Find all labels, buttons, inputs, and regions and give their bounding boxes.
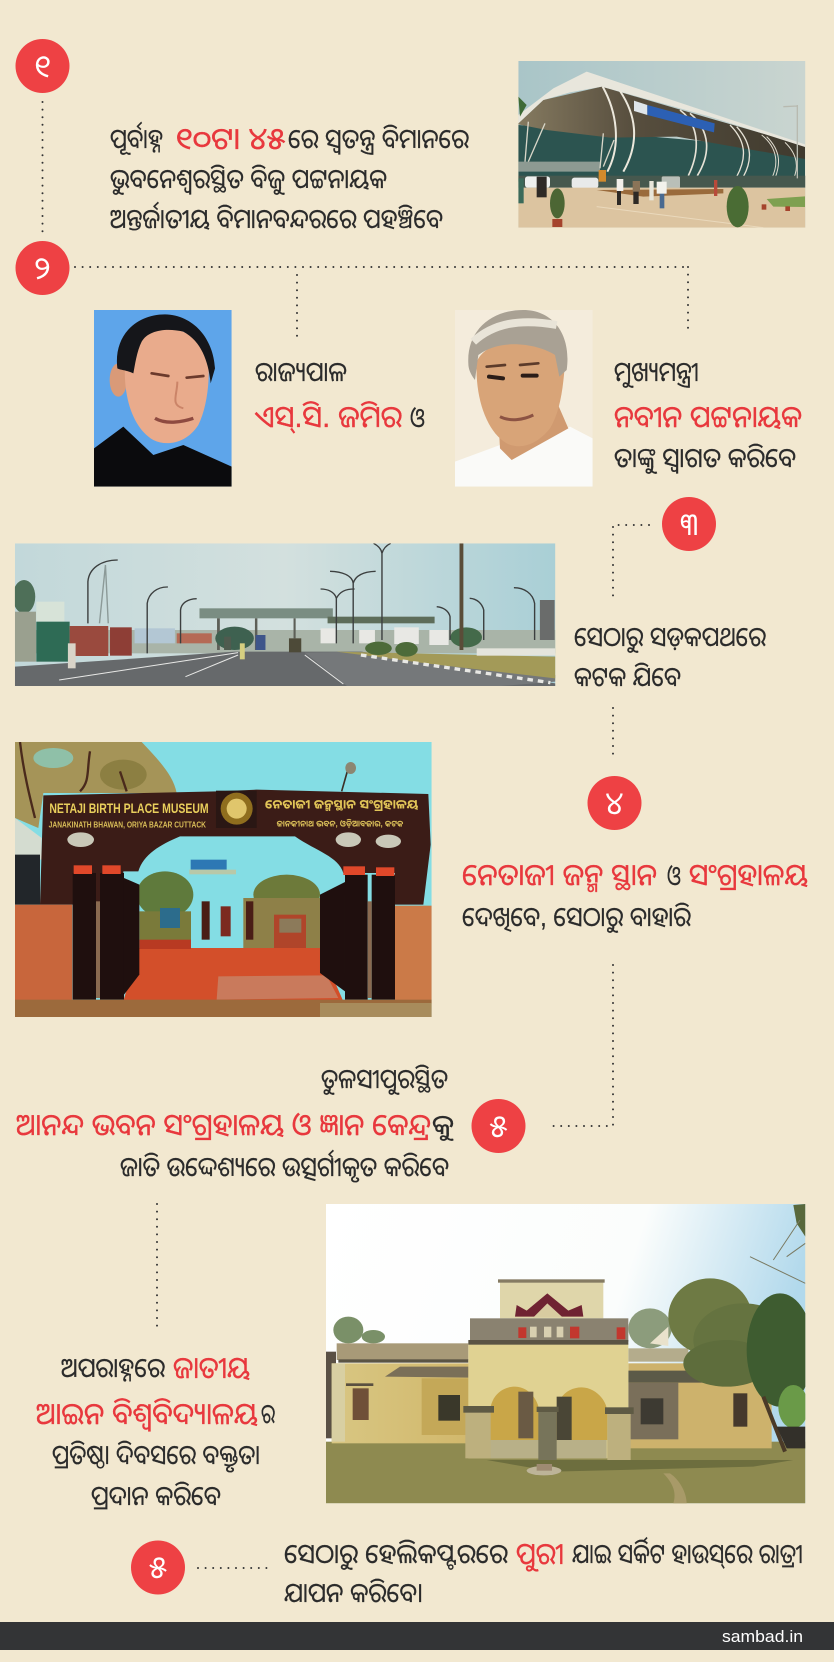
text: step 5 law university — [36, 1352, 275, 1511]
photo: highway toll plaza — [13, 543, 555, 686]
text: step 3 by road to Cuttack: କଟକ ଯିବେ — [574, 662, 681, 692]
step 5 number badge — [472, 1099, 526, 1153]
text: step 5 Ananda Bhavan: ଜାତି ଉଦ୍ଦେଶ୍ୟରେ ଉତ୍ସର୍ଗୀକୃତ କରିବେ — [120, 1149, 449, 1182]
connector: step 4 to step 5 — [550, 965, 613, 1126]
text: chief minister: ମୁଖ୍ୟମନ୍ତ୍ରୀ — [614, 357, 699, 388]
text: step 1 arrival — [110, 121, 469, 234]
step 3 number badge: ୩ — [680, 507, 698, 542]
step 6 number badge — [131, 1540, 185, 1594]
photo: airport terminal — [518, 61, 805, 228]
text: step 5 law university: ପ୍ରଦାନ କରିବେ — [91, 1481, 221, 1511]
photo: Netaji birth place museum gate: ଜାନକୀନାଥ ଭବନ, ଓଡ଼ିଆବଜାର, କଟକ — [277, 818, 403, 828]
text: step 4 museum — [462, 859, 808, 933]
text: step 4 museum: ସଂଗ୍ରହାଳୟ — [689, 859, 808, 892]
text: step 6 Puri by helicopter — [284, 1537, 803, 1608]
photo: Ananda Bhavan house — [326, 1204, 813, 1503]
text: step 3 by road to Cuttack — [574, 622, 766, 692]
text: step 4 museum: ଦେଖିବେ, ସେଠାରୁ ବାହାରି — [462, 902, 691, 933]
text: step 5 law university: ଜାତୀୟ — [173, 1352, 250, 1385]
step 1 number badge: ୧ — [34, 49, 51, 84]
connector: road text to step 4 — [612, 708, 614, 756]
text: step 6 Puri by helicopter: ପୁରୀ — [516, 1538, 564, 1572]
connector: step 6 to text — [198, 1567, 268, 1569]
text: governor: ରାଜ୍ୟପାଳ — [255, 357, 347, 387]
step 4 number badge: ୪ — [606, 786, 624, 821]
photo: governor portrait — [94, 310, 232, 487]
text: step 5 law university: ଅପରାହ୍ନରେ — [61, 1353, 165, 1383]
footer bar — [0, 1622, 834, 1650]
photo: Netaji birth place museum gate: JANAKINATH BHAWAN, ORIYA BAZAR CUTTACK — [49, 819, 206, 829]
step 4 number badge — [588, 776, 642, 830]
text: step 5 law university: ଆଇନ ବିଶ୍ୱବିଦ୍ୟାଳୟ — [36, 1398, 258, 1432]
step 2 number badge: ୨ — [34, 251, 51, 286]
text: step 5 Ananda Bhavan: କୁ — [432, 1110, 455, 1141]
step 1 number badge — [16, 39, 70, 93]
text: step 3 by road to Cuttack: ସେଠାରୁ ସଡ଼କପଥରେ — [574, 622, 766, 653]
connector: step 3 to road text — [613, 525, 649, 601]
step 5 number badge: ୫ — [490, 1109, 508, 1144]
text: chief minister: ନବୀନ ପଟ୍ଟନାୟକ — [614, 401, 802, 434]
text: step 5 Ananda Bhavan: ଆନନ୍ଦ ଭବନ ସଂଗ୍ରହାଳୟ ଓ ଜ୍ଞାନ କେନ୍ଦ୍ର — [16, 1109, 431, 1142]
text: step 1 arrival: ଭୁବନେଶ୍ୱରସ୍ଥିତ ବିଜୁ ପଟ୍ଟନାୟକ — [110, 164, 387, 195]
text: governor: ଓ — [410, 403, 425, 433]
text: step 1 arrival: ଅନ୍ତର୍ଜାତୀୟ ବିମାନବନ୍ଦରରେ ପହଞ୍ଚିବେ — [110, 201, 443, 234]
text: step 6 Puri by helicopter: ଯାପନ କରିବେ। — [284, 1578, 423, 1608]
text: step 5 law university: ପ୍ରତିଷ୍ଠା ଦିବସରେ ବକ୍ତୃତା — [52, 1440, 260, 1473]
footer bar: sambad.in — [722, 1627, 803, 1646]
photo: Netaji birth place museum gate: ନେତାଜୀ ଜନ୍ମସ୍ଥାନ ସଂଗ୍ରହାଳୟ — [265, 798, 419, 812]
text: step 4 museum: ଓ — [667, 861, 681, 891]
text: governor — [254, 357, 425, 434]
text: chief minister — [614, 357, 802, 474]
text: step 1 arrival: ରେ ସ୍ୱତନ୍ତ୍ର ବିମାନରେ — [288, 124, 469, 155]
text: chief minister: ତାଙ୍କୁ ସ୍ୱାଗତ କରିବେ — [614, 443, 796, 474]
text: step 5 Ananda Bhavan: ତୁଳସୀପୁରସ୍ଥିତ — [321, 1064, 448, 1095]
connector: step 5 down to university text — [156, 1204, 158, 1330]
step 3 number badge — [662, 497, 716, 551]
step 6 number badge: ୫ — [149, 1550, 167, 1585]
text: step 5 law university: ର — [261, 1399, 275, 1429]
text: step 5 Ananda Bhavan — [16, 1064, 455, 1182]
photo: chief minister portrait — [455, 310, 593, 487]
text: step 4 museum: ନେତାଜୀ ଜନ୍ମ ସ୍ଥାନ — [462, 859, 657, 893]
text: governor: ଏସ୍.ସି. ଜମିର — [254, 401, 402, 434]
connector: step 2 branches — [75, 267, 689, 343]
text: step 1 arrival: ପୂର୍ବାହ୍ନ — [110, 121, 163, 155]
text: step 1 arrival: ୧୦ଟା ୪୫ — [175, 123, 285, 156]
photo: Netaji birth place museum gate: NETAJI BIRTH PLACE MUSEUM — [49, 800, 209, 816]
step 2 number badge — [16, 241, 70, 295]
text: step 6 Puri by helicopter: ସେଠାରୁ ହେଲିକପ୍ଟରରେ — [284, 1539, 508, 1570]
connector: step 1 to step 2 — [42, 102, 44, 236]
photo: Netaji birth place museum gate — [15, 742, 432, 1017]
